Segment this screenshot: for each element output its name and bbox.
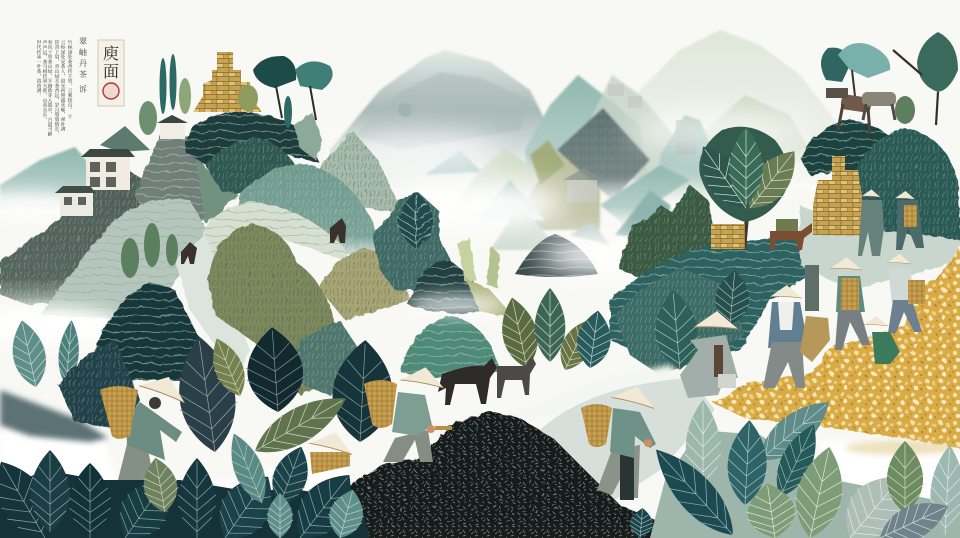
vertical subtitle bbox=[79, 37, 87, 94]
top right trees bbox=[821, 48, 850, 82]
middle-right trees bbox=[494, 127, 808, 376]
workers on golden pile bbox=[830, 254, 925, 364]
body columns: 筐背上肩，青山绿水茶香远，岁月悠悠情长， bbox=[54, 39, 59, 136]
gold tea pile bbox=[713, 245, 960, 448]
vertical subtitle: 岫 bbox=[79, 47, 87, 57]
cypress and umbrella trees bbox=[139, 54, 412, 135]
mules on road bbox=[438, 356, 536, 405]
foreground leaves bottom left bbox=[0, 428, 370, 538]
worker left with basket bbox=[100, 369, 191, 490]
pale hill right bbox=[800, 205, 960, 290]
teal forest bbox=[615, 268, 745, 375]
left hills and terraces bbox=[0, 112, 403, 370]
white winding path bbox=[0, 365, 960, 510]
worker with large tray bbox=[763, 285, 830, 388]
mist over the mid slopes bbox=[0, 295, 505, 343]
distant village bbox=[563, 84, 696, 202]
pale path downhill bbox=[175, 235, 250, 370]
stepped terrace tower bbox=[135, 135, 225, 225]
gold stacks and top-right trees bbox=[711, 32, 958, 249]
hillside houses bbox=[55, 115, 188, 216]
dark olive hill slope bbox=[0, 168, 205, 305]
red seal bbox=[103, 83, 119, 99]
large tree bbox=[688, 127, 808, 250]
green dome bbox=[400, 316, 500, 378]
khaki hill bbox=[320, 248, 410, 320]
title cartouche bbox=[98, 40, 124, 106]
right hills and woodland bbox=[610, 120, 960, 362]
vertical subtitle: 丹 bbox=[79, 59, 87, 68]
vertical subtitle: 翠 bbox=[79, 37, 87, 46]
dark green tree row bbox=[618, 185, 716, 278]
body columns: 世代传承一叶茶，清香满。 bbox=[36, 39, 41, 98]
olive canopy bbox=[208, 224, 345, 395]
top right horses bbox=[826, 88, 896, 134]
workers beside stacks bbox=[805, 189, 924, 311]
dark terraced hill bbox=[95, 282, 200, 380]
body columns: 竹林深处茶香传千里，云雾绕山。 千 bbox=[66, 39, 72, 121]
olive trees in the middle bbox=[208, 192, 515, 395]
left text block bbox=[36, 37, 124, 137]
dark distant mound bbox=[515, 234, 598, 277]
worker centre with basket bbox=[364, 364, 452, 462]
vertical subtitle: 茶 bbox=[79, 69, 87, 79]
black tea pile bbox=[345, 411, 655, 538]
sage hill bbox=[238, 163, 385, 260]
dark mound bbox=[408, 260, 490, 313]
gold tea bricks pile on summit bbox=[193, 52, 262, 112]
body columns: 云岭深处采茶人，晨光初照露未晞，翠叶满 bbox=[60, 39, 65, 133]
low grey shrubs bbox=[0, 390, 108, 442]
broad teal hillside bbox=[610, 236, 830, 362]
mist band across the valley bbox=[0, 112, 810, 273]
summit terrace bbox=[800, 120, 905, 178]
vertical subtitle: 诉 bbox=[79, 85, 87, 94]
pale ridge bbox=[318, 130, 403, 213]
worker right with basket bbox=[581, 382, 658, 500]
pale terraced field bbox=[40, 199, 208, 320]
dark forest mound bbox=[850, 128, 960, 240]
small mid-ground horses bbox=[181, 218, 346, 264]
teal bush bbox=[372, 192, 452, 290]
title cartouche: 庾 bbox=[103, 45, 119, 63]
foreground leaves bottom right bbox=[628, 389, 960, 538]
dark shrub mound bbox=[58, 340, 140, 430]
mid foreground leaves left bbox=[0, 282, 397, 467]
title cartouche: 面 bbox=[103, 63, 119, 81]
mid shrubs bbox=[494, 294, 545, 372]
crouching worker with box bbox=[309, 428, 356, 474]
worker with shoulder bag bbox=[680, 311, 738, 398]
pale green leaves cluster bbox=[458, 238, 476, 282]
body columns bbox=[36, 39, 72, 137]
body columns: 声声远，茶马相传到天涯。山高水长。 bbox=[42, 39, 47, 122]
brown horse with load bbox=[770, 219, 812, 250]
dark terraced summit bbox=[185, 112, 320, 166]
saplings on pale terrace bbox=[121, 223, 178, 278]
body columns: 春风十里茶山绿，手摘新芽入篮中，古道马蹄 bbox=[46, 39, 52, 137]
distant mountains bbox=[0, 30, 850, 250]
